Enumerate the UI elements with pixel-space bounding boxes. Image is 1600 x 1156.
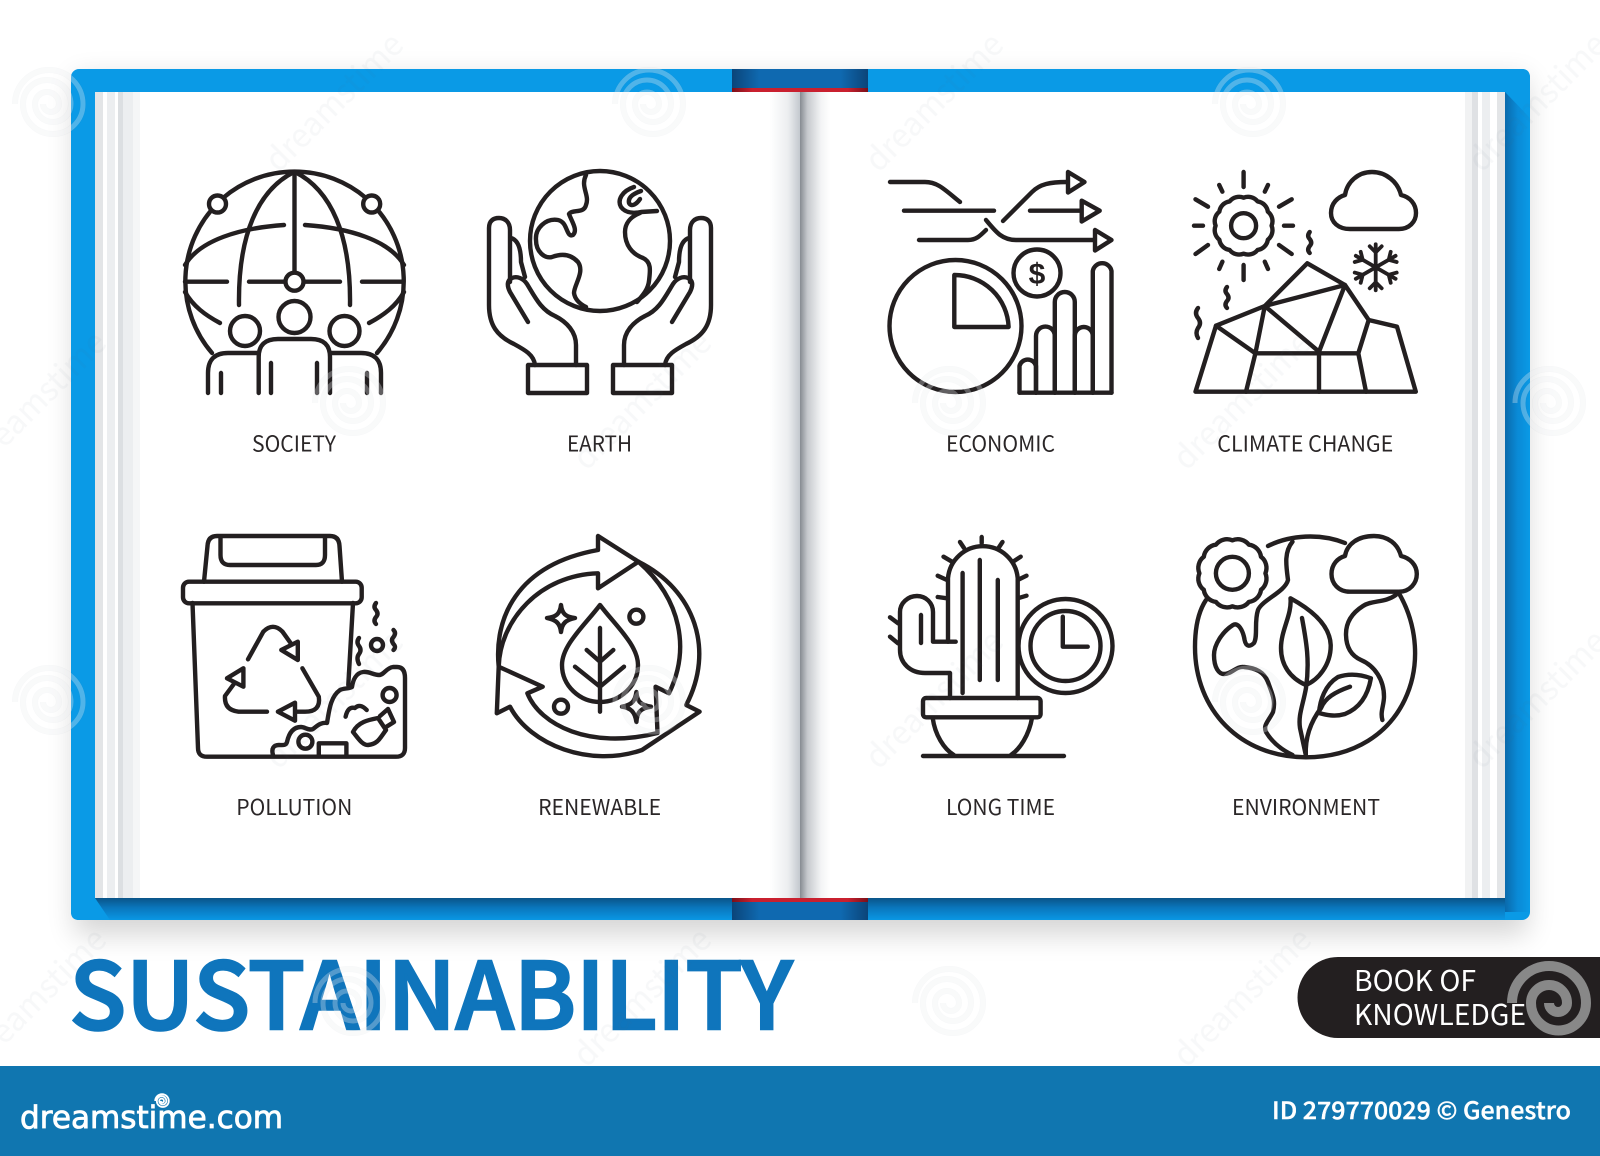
pie chart <box>890 260 1022 392</box>
recycle arrows <box>225 627 319 721</box>
label: earth: EARTH <box>567 428 632 458</box>
cactus <box>890 537 1026 698</box>
footer brand spiral <box>155 1094 169 1107</box>
icon: economic <box>890 172 1112 393</box>
dollar coin: $ <box>1029 258 1046 291</box>
bin body <box>192 603 405 757</box>
iceberg <box>1196 263 1416 392</box>
icon: renewable <box>497 536 700 756</box>
bar chart <box>1020 263 1112 393</box>
pill text: BOOK OF <box>1354 959 1476 1000</box>
pill text: KNOWLEDGE <box>1354 993 1526 1034</box>
watermark overlay: dreamstime <box>253 618 412 777</box>
cycle arrows <box>497 536 700 756</box>
cloud <box>1332 536 1417 592</box>
watermark overlay: dreamstime <box>253 21 412 180</box>
label: renewable: RENEWABLE <box>538 791 661 822</box>
label: long time: LONG TIME <box>946 791 1055 822</box>
sun <box>1194 172 1293 280</box>
clock <box>1018 599 1112 693</box>
footer image id: ID 279770029 © Genestro <box>1272 1091 1571 1126</box>
icon: right hand <box>613 218 711 393</box>
label: society: SOCIETY <box>252 428 337 458</box>
label: environment: ENVIRONMENT <box>1232 791 1380 822</box>
watermark overlay: dreamstime <box>561 319 720 478</box>
icon: pollution bin <box>183 536 405 757</box>
continents <box>1214 542 1292 755</box>
label: economic: ECONOMIC <box>946 428 1055 458</box>
icon: left hand <box>489 218 587 393</box>
book: blue cover with open pages <box>71 69 1530 934</box>
watermark overlay: dreamstime <box>853 21 1012 180</box>
icon: earth in hands <box>489 171 711 393</box>
icon: environment <box>1195 536 1417 757</box>
footer band <box>0 1066 1600 1156</box>
footer brand: dreamstime.com <box>20 1100 283 1136</box>
globe <box>1195 537 1415 757</box>
sun gear <box>1198 539 1266 607</box>
icon: climate change <box>1194 172 1416 392</box>
watermark overlay: dreamstime <box>1161 319 1320 478</box>
sparkles and dots <box>547 605 651 722</box>
leaf <box>562 605 638 712</box>
spiral logo <box>1512 966 1586 1030</box>
garbage details <box>298 603 397 755</box>
bin lid <box>183 536 362 603</box>
icon: long time cactus <box>890 537 1112 756</box>
leaves <box>1281 598 1371 755</box>
snowflake <box>1355 244 1397 290</box>
watermark overlay: dreamstime <box>1161 916 1320 1075</box>
heat waves <box>1196 232 1311 338</box>
pot <box>923 698 1064 756</box>
watermark overlay: dreamstime <box>853 618 1012 777</box>
title: SUSTAINABILITY <box>70 923 794 1056</box>
label: climate change: CLIMATE CHANGE <box>1217 428 1393 458</box>
icon: society <box>185 172 404 393</box>
label: pollution: POLLUTION <box>236 791 352 822</box>
cloud <box>1331 172 1416 229</box>
pill: book of knowledge <box>1298 957 1600 1038</box>
watermark overlay: dreamstime <box>561 916 720 1075</box>
dollar coin <box>1014 250 1060 296</box>
